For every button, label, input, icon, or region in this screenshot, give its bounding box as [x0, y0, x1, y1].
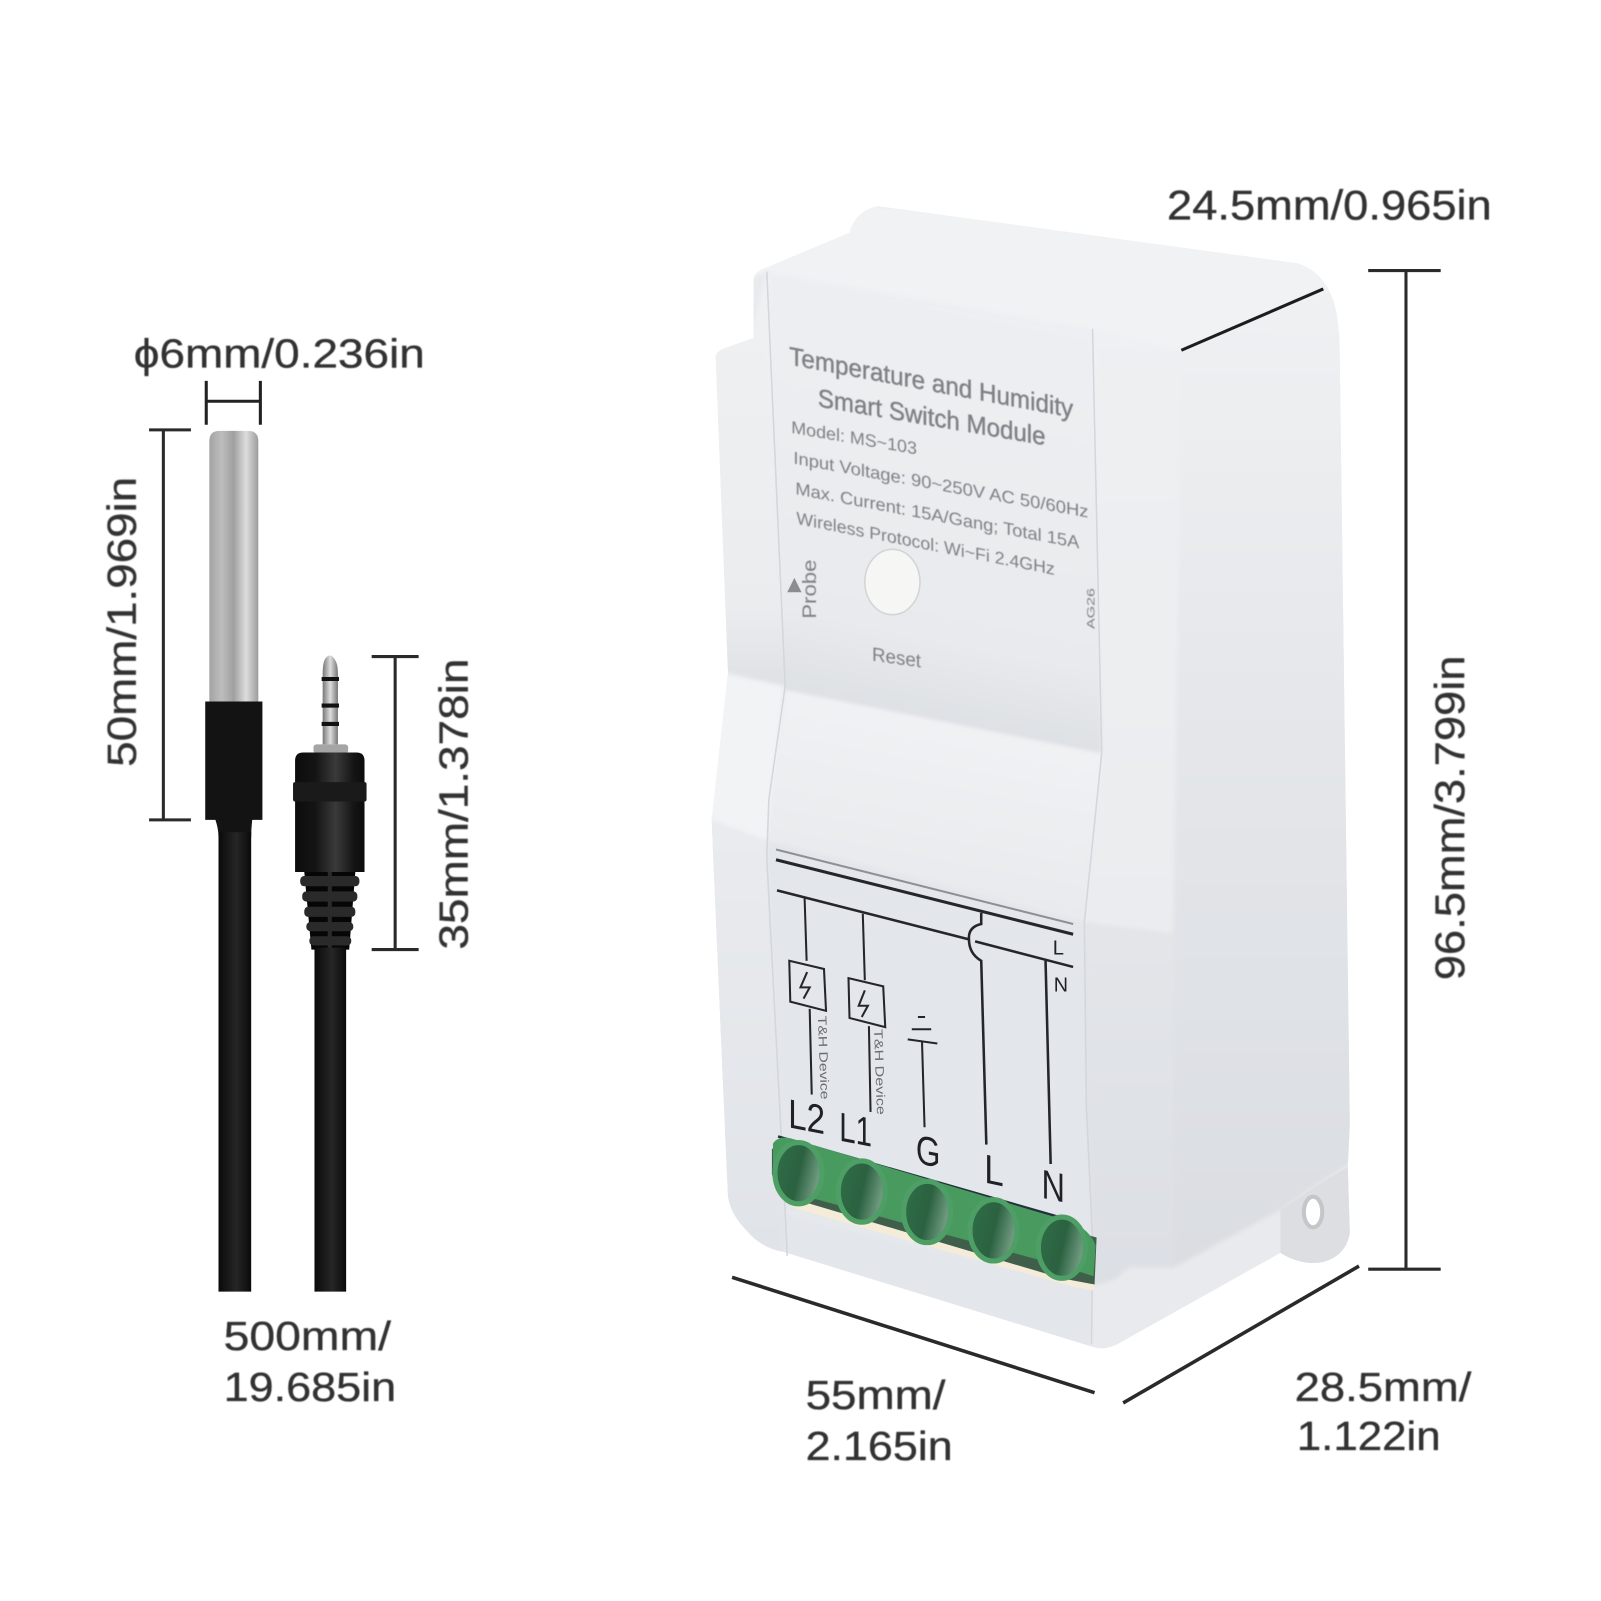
probe length label: 50mm/1.969in [99, 477, 145, 767]
probe metal tip [209, 431, 258, 702]
diagram text: G [916, 1126, 940, 1177]
diagram text: L [984, 1146, 1004, 1195]
thickness label [1295, 1364, 1472, 1459]
depth label: 24.5mm/0.965in [1167, 182, 1492, 229]
terminal cavity shadow [772, 1149, 1097, 1284]
probe diameter label: ϕ6mm/0.236in [134, 331, 425, 377]
cable length label: 19.685in [224, 1364, 396, 1410]
module right chamfer lower [1089, 1095, 1112, 1284]
width label [806, 1372, 953, 1469]
terminal top shadow line [778, 1136, 1077, 1222]
N wire [1046, 961, 1051, 1164]
L wire with hop [969, 913, 986, 1145]
thickness label: 1.122in [1297, 1413, 1441, 1459]
module left lower wall [705, 817, 785, 1266]
diagram text: L1 [839, 1104, 872, 1156]
L1 relay branch [848, 914, 885, 1112]
jack washer [313, 744, 348, 754]
product label text: Wireless Protocol: Wi~Fi 2.4GHz [796, 508, 1055, 579]
module wiring panel background [767, 840, 1093, 1289]
L2 relay branch [789, 897, 826, 1095]
module left chamfer [705, 669, 784, 840]
jack strain relief [300, 872, 359, 950]
product label text [789, 343, 1098, 673]
mounting tab [1280, 1167, 1350, 1263]
module front label panel [788, 672, 1099, 750]
relief ribs [300, 872, 359, 950]
terminal strip [773, 1138, 1096, 1276]
probe diameter dimension bracket [206, 381, 260, 425]
ground symbol [908, 1017, 937, 1127]
module body silhouette [712, 206, 1350, 1348]
temperature probe [205, 431, 262, 1292]
live and neutral bus lines [776, 850, 1073, 924]
probe direction arrow [787, 578, 802, 592]
product label text: Input Voltage: 90~250V AC 50/60Hz [793, 448, 1088, 522]
smart switch module [705, 204, 1363, 1358]
module lower front panel [786, 696, 1098, 764]
tab screw hole [1304, 1197, 1322, 1227]
green terminal block [772, 1136, 1097, 1291]
product label text: Reset [872, 644, 922, 673]
product label text: AG26 [1086, 588, 1098, 629]
product label text: Smart Switch Module [818, 385, 1046, 451]
thickness dimension line [1123, 1266, 1359, 1403]
module right chamfer upper [1094, 811, 1172, 930]
width label: 2.165in [806, 1423, 953, 1469]
jack length dimension line [372, 657, 419, 950]
diagram text: L [1053, 938, 1064, 960]
probe cable [219, 832, 251, 1292]
height dimension line [1368, 271, 1441, 1269]
module left upper wall [705, 272, 786, 690]
relief core [304, 872, 355, 950]
jack length label: 35mm/1.378in [431, 659, 477, 950]
diagram text [788, 938, 1068, 1212]
jack cable [314, 948, 346, 1292]
product label text: Model: MS~103 [791, 417, 917, 458]
diagram text: N [1054, 974, 1068, 996]
panel edge lines [767, 272, 1102, 1344]
infographic canvas [105, 188, 1490, 1462]
reset button [865, 549, 920, 615]
terminal cavity highlight [776, 1174, 1095, 1291]
module shaded faces [712, 662, 1350, 1344]
diagram text: T&H Device [815, 1016, 832, 1100]
audio jack plug [293, 656, 367, 1292]
product label text: Probe [799, 560, 821, 619]
tab plate [1280, 1167, 1350, 1263]
probe length dimension line [149, 430, 191, 820]
cable length label: 500mm/ [224, 1313, 392, 1359]
module right wall [1174, 778, 1350, 1265]
diagram text: L2 [788, 1091, 825, 1143]
module bottom lip [802, 1258, 1082, 1344]
module right skirt [1093, 1210, 1287, 1358]
depth dimension line [1181, 289, 1323, 350]
width label: 55mm/ [806, 1372, 946, 1418]
module top face [775, 268, 1324, 344]
thickness label: 28.5mm/ [1295, 1364, 1472, 1410]
probe black sleeve [205, 701, 262, 837]
jack body ring [293, 782, 367, 802]
product label text: Temperature and Humidity [789, 343, 1073, 424]
diagram text: T&H Device [871, 1029, 888, 1115]
diagram text: N [1041, 1161, 1065, 1212]
wiring diagram [776, 850, 1073, 1164]
jack body [295, 753, 365, 872]
product label text: Max. Current: 15A/Gang; Total 15A [795, 478, 1080, 552]
cable length label [224, 1313, 396, 1410]
soft-shaded surfaces [712, 662, 1350, 1344]
terminal screw holes [775, 1143, 1085, 1278]
jack metal tip [323, 656, 338, 744]
height label: 96.5mm/3.799in [1426, 656, 1473, 980]
jack tip insulator bands [322, 679, 339, 724]
width dimension line [732, 1277, 1095, 1393]
